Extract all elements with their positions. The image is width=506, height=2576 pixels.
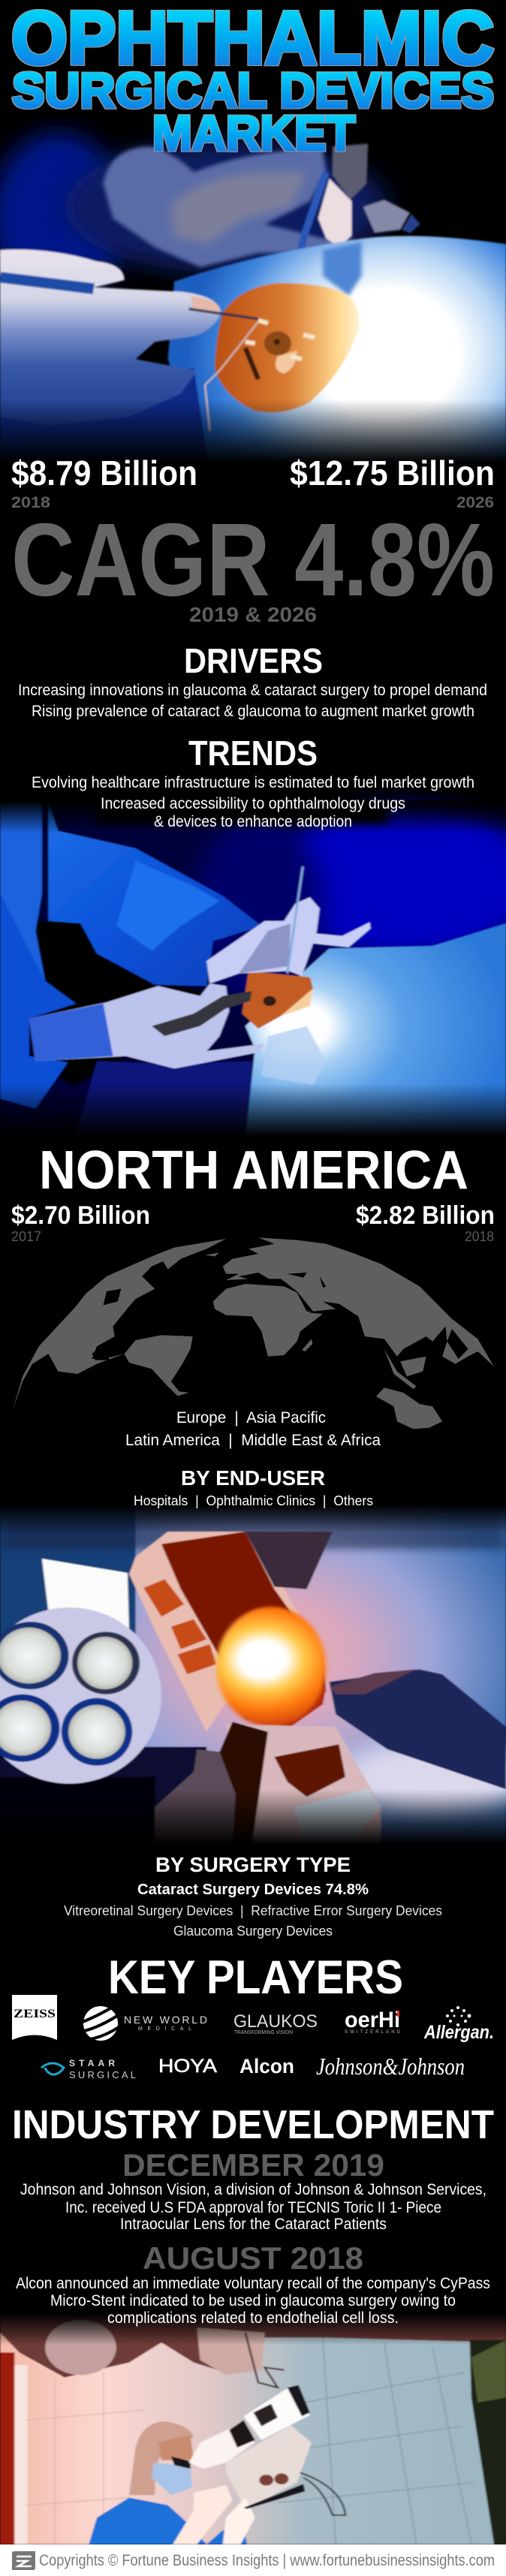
CAGR period: 2019 & 2026	[189, 603, 317, 626]
regional stats: $2.82 Billion	[356, 1201, 495, 1230]
footer	[0, 2544, 506, 2576]
key players heading: KEY PLAYERS	[108, 1951, 403, 2004]
logo: Allergan: Allergan.	[423, 2022, 494, 2043]
market size stats: $8.79 Billion	[11, 453, 197, 493]
market size stats: 2026	[456, 494, 494, 511]
logo: New World Medical	[83, 2006, 207, 2041]
by end-user	[134, 1466, 373, 1508]
logo: STAAR Surgical	[41, 2058, 136, 2080]
title: SURGICAL DEVICES	[12, 62, 494, 118]
fourth photo: microscope operator	[0, 2314, 506, 2544]
trends: Evolving healthcare infrastructure is estimated to fuel market growth	[32, 774, 474, 791]
regional heading: NORTH AMERICA	[39, 1140, 468, 1201]
third photo: surgical lamp	[0, 1505, 506, 1859]
by end-user: BY END-USER	[181, 1466, 325, 1490]
key player logos	[12, 1995, 494, 2080]
drivers	[18, 641, 487, 720]
market size stats: 2018	[11, 494, 50, 511]
other regions: Europe | Asia Pacific	[176, 1409, 326, 1427]
development: December 2019: DECEMBER 2019	[122, 2147, 384, 2183]
by surgery type: Cataract Surgery Devices 74.8%	[137, 1882, 369, 1898]
logo: New World Medical: NEW WORLD	[124, 2014, 207, 2026]
regional stats: $2.70 Billion	[11, 1201, 150, 1230]
drivers: Rising prevalence of cataract & glaucoma to augment market growth	[32, 703, 474, 720]
development: December 2019	[20, 2147, 486, 2233]
logo: Oertli: oerHi	[345, 2008, 400, 2032]
logo: Oertli: SWITZERLAND	[345, 2030, 401, 2035]
trends: TRENDS	[188, 734, 318, 773]
by surgery type	[64, 1853, 442, 1939]
logo: Zeiss: ZEISS	[14, 2008, 56, 2020]
development: December 2019: Inc. received U.S FDA approval for TECNIS Toric II 1- Piece	[65, 2199, 441, 2216]
trends: & devices to enhance adoption	[154, 813, 352, 830]
by surgery type: Glaucoma Surgery Devices	[173, 1924, 333, 1939]
by surgery type: Vitreoretinal Surgery Devices | Refractive Error Surgery Devices	[64, 1903, 442, 1918]
alcon development text: AUGUST 2018	[143, 2240, 363, 2276]
logo: Zeiss	[12, 1995, 57, 2040]
logo: STAAR Surgical: SURGICAL	[69, 2069, 136, 2080]
title: MARKET	[152, 105, 355, 161]
drivers: DRIVERS	[184, 641, 323, 680]
logo: Hoya: HOYA	[158, 2056, 217, 2077]
market size stats: $12.75 Billion	[290, 453, 495, 493]
logo: Glaukos: TRANSFORMING VISION	[234, 2030, 293, 2035]
icon: Fortune Business Insights logo	[12, 2551, 35, 2570]
by end-user: Hospitals | Ophthalmic Clinics | Others	[134, 1493, 373, 1508]
by surgery type: BY SURGERY TYPE	[155, 1853, 351, 1876]
hero photo: eye surgery	[0, 132, 506, 485]
second photo: surgeon hands	[0, 801, 506, 1158]
logo: Alcon: Alcon	[239, 2055, 294, 2077]
logo: Allergan	[423, 2006, 494, 2043]
regional stats: 2017	[11, 1229, 41, 1244]
alcon development text: Micro-Stent indicated to be used in glaucoma surgery owing to	[50, 2292, 456, 2309]
logo: STAAR Surgical: STAAR	[69, 2058, 115, 2068]
trends	[32, 734, 474, 830]
market size stats	[11, 453, 495, 511]
alcon development text	[16, 2240, 490, 2327]
other regions	[125, 1409, 381, 1449]
logo: Glaukos: GLAUKOS	[233, 2011, 318, 2032]
logo: Johnson & Johnson: Johnson&Johnson	[316, 2053, 465, 2080]
trends: Increased accessibility to ophthalmology drugs	[101, 795, 405, 812]
regional stats	[11, 1201, 495, 1244]
regional stats: 2018	[465, 1229, 494, 1244]
title	[11, 0, 494, 161]
development: December 2019: Intraocular Lens for the Cataract Patients	[120, 2216, 387, 2233]
world map globe	[12, 1237, 494, 1429]
logo: New World Medical: MEDICAL	[138, 2026, 191, 2032]
other regions: Latin America | Middle East & Africa	[125, 1432, 381, 1449]
alcon development text: complications related to endothelial cell loss.	[107, 2309, 399, 2327]
